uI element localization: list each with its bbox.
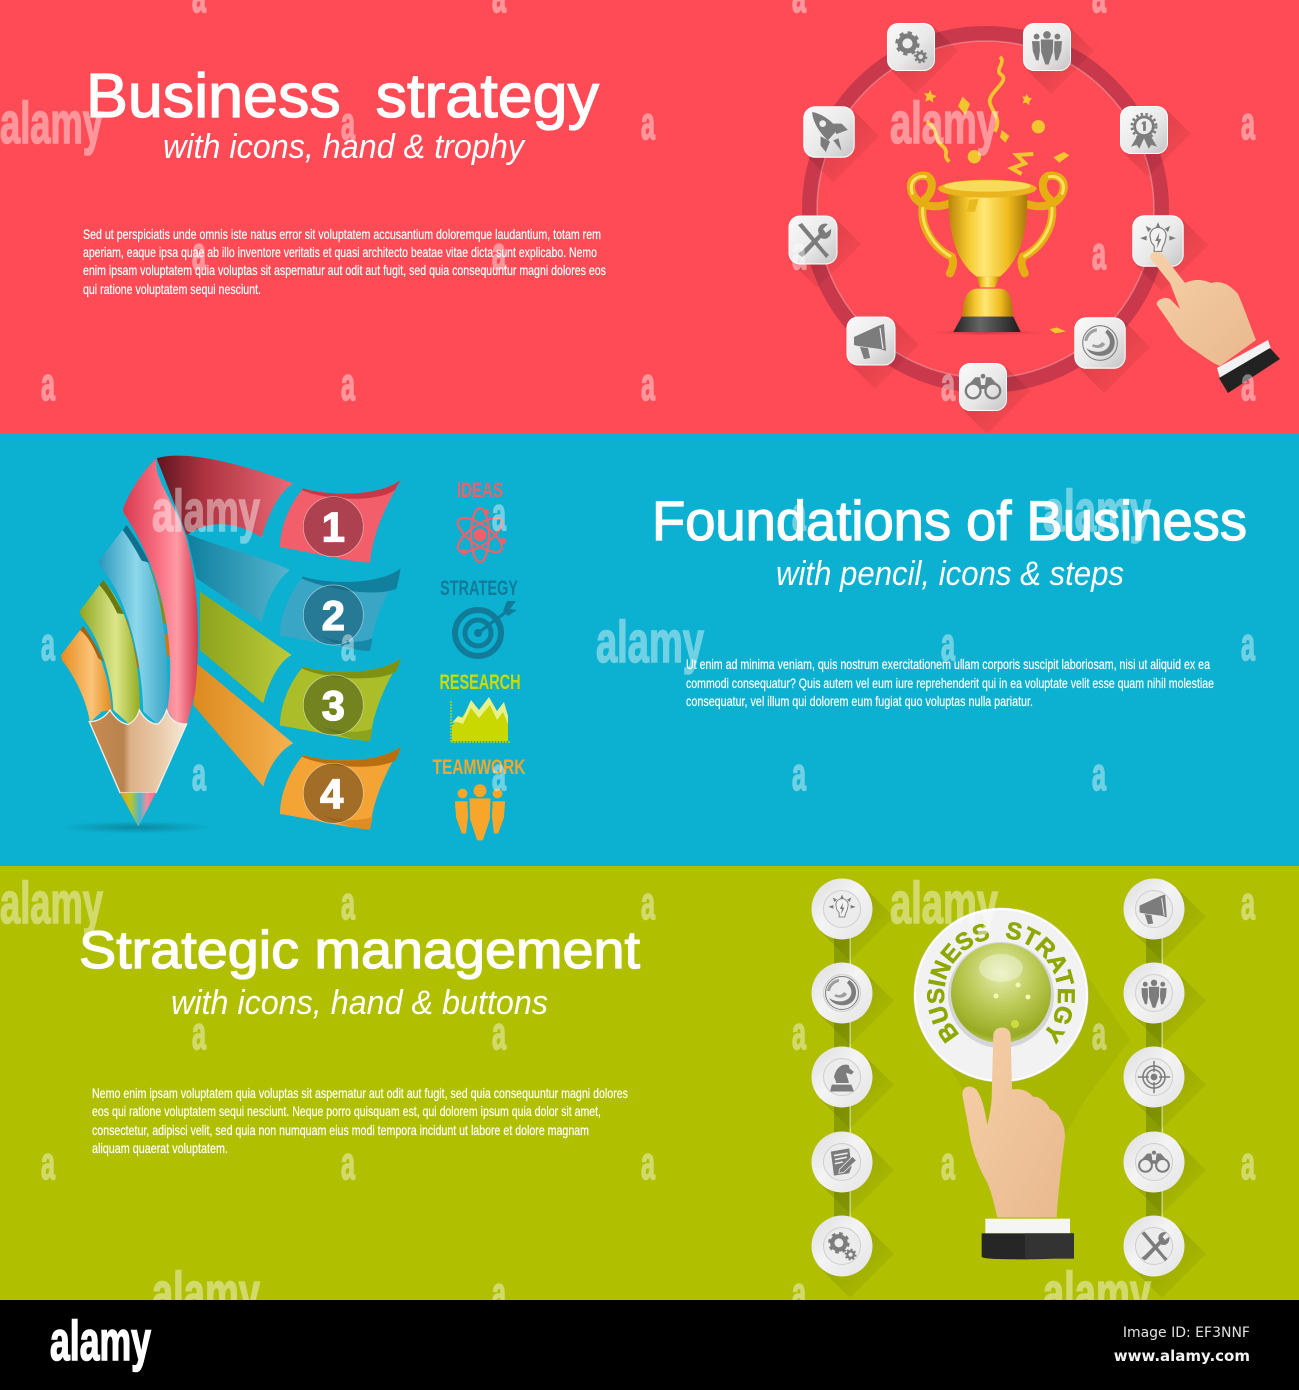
blue pencil ribbon — [98, 525, 168, 725]
stock photo watermarks: a — [192, 748, 206, 800]
disc icon: megaphone — [1124, 878, 1206, 961]
step flag 4 — [280, 747, 401, 829]
ribbon banners behind pencil — [119, 456, 293, 787]
step flag 2 — [280, 568, 401, 651]
stock photo watermarks: a — [941, 618, 955, 670]
disc icon: binoculars — [1124, 1132, 1206, 1214]
stock photo watermarks: alamy — [152, 479, 260, 544]
disc icon: radar — [812, 962, 894, 1045]
stock photo watermarks: a — [1241, 1137, 1255, 1189]
subtitle: with icons, hand and buttons: with icons, hand & buttons — [171, 984, 548, 1022]
step label: strategy with target icon — [440, 577, 518, 656]
trophy handles — [911, 176, 1064, 273]
stock photo watermarks: alamy — [890, 871, 998, 936]
stock photo watermarks: a — [1241, 97, 1255, 149]
confetti — [924, 57, 1069, 333]
stock photo watermarks: a — [792, 748, 806, 800]
step flag 3 — [280, 658, 401, 741]
curved button label: BUSINESS STRATEGY — [926, 922, 1075, 1045]
stock photo watermarks: a — [641, 1137, 655, 1189]
stock photo watermarks: alamy — [1043, 1261, 1151, 1326]
stock photo watermarks: a — [792, 1007, 806, 1059]
stock photo watermarks: a — [492, 748, 506, 800]
text block: lorem paragraph: consectetur, adipisci velit, sed quia non numquam eius modi tempora incidunt ut labore et dolore magnam — [92, 1122, 589, 1138]
stock photo watermarks: a — [341, 358, 355, 410]
step label: teamwork with people icon — [432, 756, 526, 840]
stock photo watermarks: a — [641, 877, 655, 929]
step label: research with chart icon: RESEARCH — [440, 671, 520, 694]
stock photo watermarks: alamy — [0, 91, 103, 156]
stock photo watermarks: a — [492, 1007, 506, 1059]
stock photo watermarks: a — [792, 488, 806, 540]
stock photo watermarks: a — [341, 877, 355, 929]
stock photo watermarks: a — [1241, 358, 1255, 410]
step label: ideas with atom icon — [453, 479, 507, 562]
trophy cup — [948, 195, 1027, 277]
icon tile: binoculars — [959, 363, 1030, 434]
stock photo watermarks: a — [641, 358, 655, 410]
stock photo watermarks: a — [1092, 1007, 1106, 1059]
disc icon: chess knight — [812, 1046, 894, 1129]
trophy with confetti — [911, 57, 1069, 335]
stock photo watermarks: a — [941, 1137, 955, 1189]
step flag 1 — [280, 480, 401, 563]
left icon column — [812, 878, 894, 1298]
stock photo watermarks: a — [1241, 618, 1255, 670]
pencil wood — [89, 710, 187, 793]
stock photo watermarks: alamy — [596, 610, 704, 675]
icon tile: tools — [789, 216, 861, 288]
text block: lorem paragraph: aliquam quaerat voluptatem. — [92, 1140, 228, 1156]
pencil tip — [120, 793, 156, 827]
panel: foundations of business — [0, 433, 1299, 866]
text block: lorem paragraph: Nemo enim ipsam voluptatem quia voluptas sit aspernatur aut odit aut fugit, sed quia consequuntur magni dolores — [92, 1085, 628, 1101]
step flag 4: 4 — [320, 770, 343, 817]
text block: lorem paragraph: aperiam, eaque ipsa quae ab illo inventore veritatis et quasi architecto beatae vitae dicta sunt explicabo. Nemo — [83, 244, 597, 260]
stock photo watermarks: a — [1092, 748, 1106, 800]
text block: lorem paragraph: consequatur, vel illum qui dolorem eum fugiat quo voluptas nulla pariatur. — [686, 693, 1033, 709]
stock photo watermarks: a — [341, 618, 355, 670]
disc icon: light bulb — [812, 878, 894, 961]
icon tile: light bulb — [1133, 216, 1208, 291]
text block: lorem paragraph: Sed ut perspiciatis unde omnis iste natus error sit voluptatem accusantium doloremque laudantium, totam rem — [83, 226, 601, 242]
disc icon: tools — [1124, 1216, 1206, 1298]
pencil with ribbons and numbered steps — [60, 456, 401, 833]
panel: footer credit bar — [0, 1300, 1299, 1390]
title: business strategy: Business strategy — [86, 62, 599, 131]
business strategy push button — [914, 908, 1130, 1180]
ring of icons — [789, 23, 1208, 434]
stock photo watermarks: a — [1241, 877, 1255, 929]
disc icon: team — [1124, 962, 1206, 1045]
disc icon: gears — [812, 1216, 894, 1298]
stock photo watermarks: a — [41, 1137, 55, 1189]
icon tile: award — [1120, 106, 1191, 177]
text block: lorem paragraph: enim ipsam voluptatem quia voluptas sit aspernatur aut odit aut fugit, sed quia consequuntur magni dolores eos — [83, 262, 606, 278]
disc icon: crosshair target — [1124, 1046, 1206, 1129]
text block: lorem paragraph — [83, 226, 606, 297]
text block: lorem paragraph — [686, 656, 1214, 709]
step flag 3: 3 — [322, 682, 345, 729]
green pencil ribbon — [79, 580, 140, 725]
pressing hand and cuff — [962, 1027, 1074, 1259]
stock photo watermarks: a — [192, 1007, 206, 1059]
stock photo watermarks: alamy — [890, 91, 998, 156]
step label: ideas with atom icon: IDEAS — [457, 479, 503, 502]
text block: lorem paragraph: eos qui ratione voluptatem sequi nesciunt. Neque porro quisquam est, qui dolorem ipsum quia dolor sit amet, — [92, 1103, 601, 1119]
stock photo watermarks: a — [492, 227, 506, 279]
stock photo watermarks: alamy — [0, 871, 103, 936]
title: foundations of business: Foundations of Business — [652, 489, 1247, 552]
site url: www.alamy.com — [1114, 1347, 1250, 1365]
orange pencil ribbon — [61, 626, 112, 723]
stock photo watermarks: a — [41, 358, 55, 410]
stock photo watermarks: a — [341, 1137, 355, 1189]
step label: strategy with target icon: STRATEGY — [440, 577, 518, 600]
icon tile: team — [1023, 23, 1094, 94]
stock photo watermarks: a — [1092, 227, 1106, 279]
icon tile: megaphone — [847, 317, 919, 389]
stock photo watermarks: a — [792, 227, 806, 279]
text block: lorem paragraph — [92, 1085, 628, 1156]
stock photo watermarks: a — [192, 227, 206, 279]
stock photo watermarks: a — [41, 618, 55, 670]
stock photo watermarks: a — [492, 488, 506, 540]
image id: Image ID: EF3NNF — [1123, 1325, 1250, 1341]
stock photo watermarks: alamy — [1043, 479, 1151, 544]
subtitle: with icons, hand and trophy: with icons, hand & trophy — [163, 128, 526, 166]
icon tile: gears — [887, 23, 958, 94]
text block: lorem paragraph: qui ratione voluptatem sequi nesciunt. — [83, 281, 261, 297]
icon tile: rocket — [804, 107, 879, 182]
red pencil ribbon — [123, 458, 198, 725]
panel: business strategy — [0, 0, 1299, 434]
disc icon: document — [812, 1132, 894, 1214]
stock photo watermarks: a — [492, 1267, 506, 1319]
stock photo watermarks: alamy — [152, 1261, 260, 1326]
stock photo watermarks: a — [941, 358, 955, 410]
stock photo watermarks: a — [341, 97, 355, 149]
stock photo watermarks: a — [641, 97, 655, 149]
panel: strategic management — [0, 866, 1299, 1300]
step flag 2: 2 — [322, 592, 345, 639]
subtitle: with pencil, icons and steps: with pencil, icons & steps — [776, 555, 1124, 593]
step flag 1: 1 — [322, 504, 345, 551]
title: strategic management: Strategic management — [79, 921, 640, 980]
right icon column — [1124, 878, 1206, 1298]
pointing hand and cuff — [1150, 252, 1280, 393]
logo: alamy: alamy — [50, 1309, 151, 1372]
stock photo watermarks: a — [792, 1267, 806, 1319]
icon tile: radar — [1075, 318, 1150, 393]
step label: research with chart icon — [440, 671, 520, 742]
step label: teamwork with people icon: TEAMWORK — [432, 756, 526, 779]
